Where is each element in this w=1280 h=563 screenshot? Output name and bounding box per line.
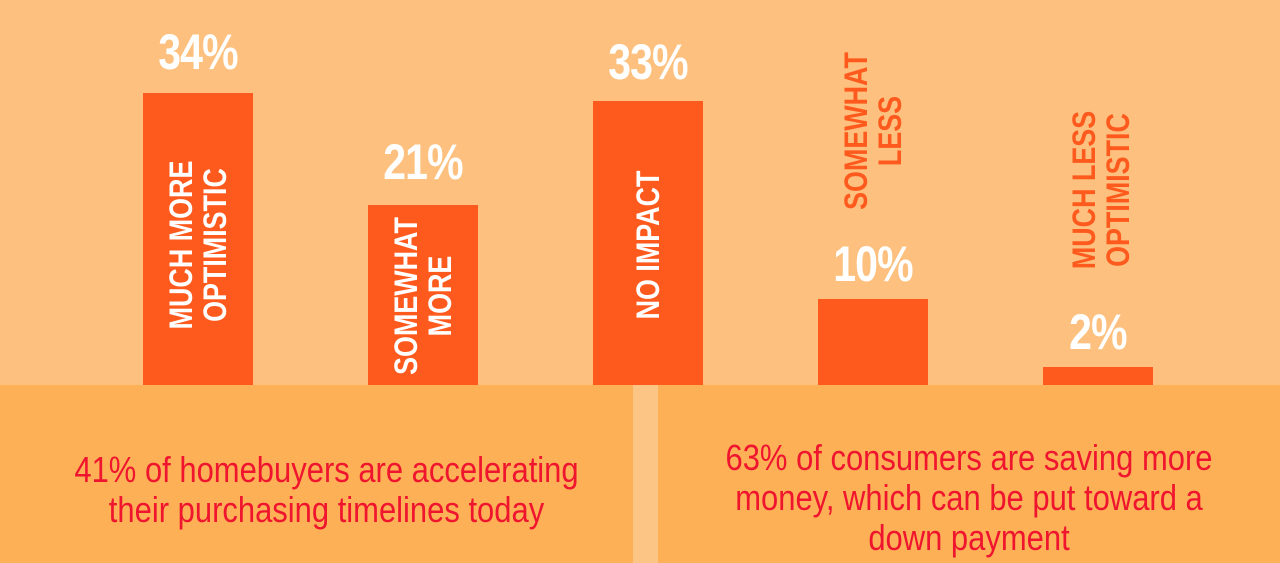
text: right stat xyxy=(725,437,1212,558)
bottom band xyxy=(0,385,1280,563)
text: MUCH MORE xyxy=(163,161,199,329)
bar: much less optimistic xyxy=(1043,367,1153,385)
text: right stat: down payment xyxy=(868,517,1070,558)
text: right stat: 63% of consumers are saving more xyxy=(725,437,1212,478)
label 10%: 10% xyxy=(833,236,913,292)
text: OPTIMISTIC xyxy=(1100,113,1136,267)
label 33%: 33% xyxy=(608,34,688,90)
text: left stat: 41% of homebuyers are accelerating xyxy=(74,449,579,490)
text: MORE xyxy=(422,256,458,336)
label much less optimistic xyxy=(1066,111,1136,269)
text: right stat: money, which can be put toward a xyxy=(735,477,1203,518)
label much more optimistic xyxy=(163,161,233,329)
text: MUCH LESS xyxy=(1066,111,1102,269)
text: LESS xyxy=(872,96,908,166)
bar: somewhat more xyxy=(368,205,478,385)
text: SOMEWHAT xyxy=(838,52,874,210)
bar: somewhat less xyxy=(818,299,928,385)
label 34%: 34% xyxy=(158,24,238,80)
label somewhat less xyxy=(838,52,908,210)
label 2%: 2% xyxy=(1069,304,1127,360)
bar: no impact xyxy=(593,101,703,385)
label 21%: 21% xyxy=(383,134,463,190)
text: OPTIMISTIC xyxy=(197,168,233,322)
text: left stat xyxy=(74,449,579,530)
label somewhat more xyxy=(388,217,458,375)
text: SOMEWHAT xyxy=(388,217,424,375)
text: left stat: their purchasing timelines today xyxy=(109,489,544,530)
label no impact: NO IMPACT xyxy=(630,171,666,319)
divider strip xyxy=(633,385,658,563)
bar: much more optimistic xyxy=(143,93,253,385)
